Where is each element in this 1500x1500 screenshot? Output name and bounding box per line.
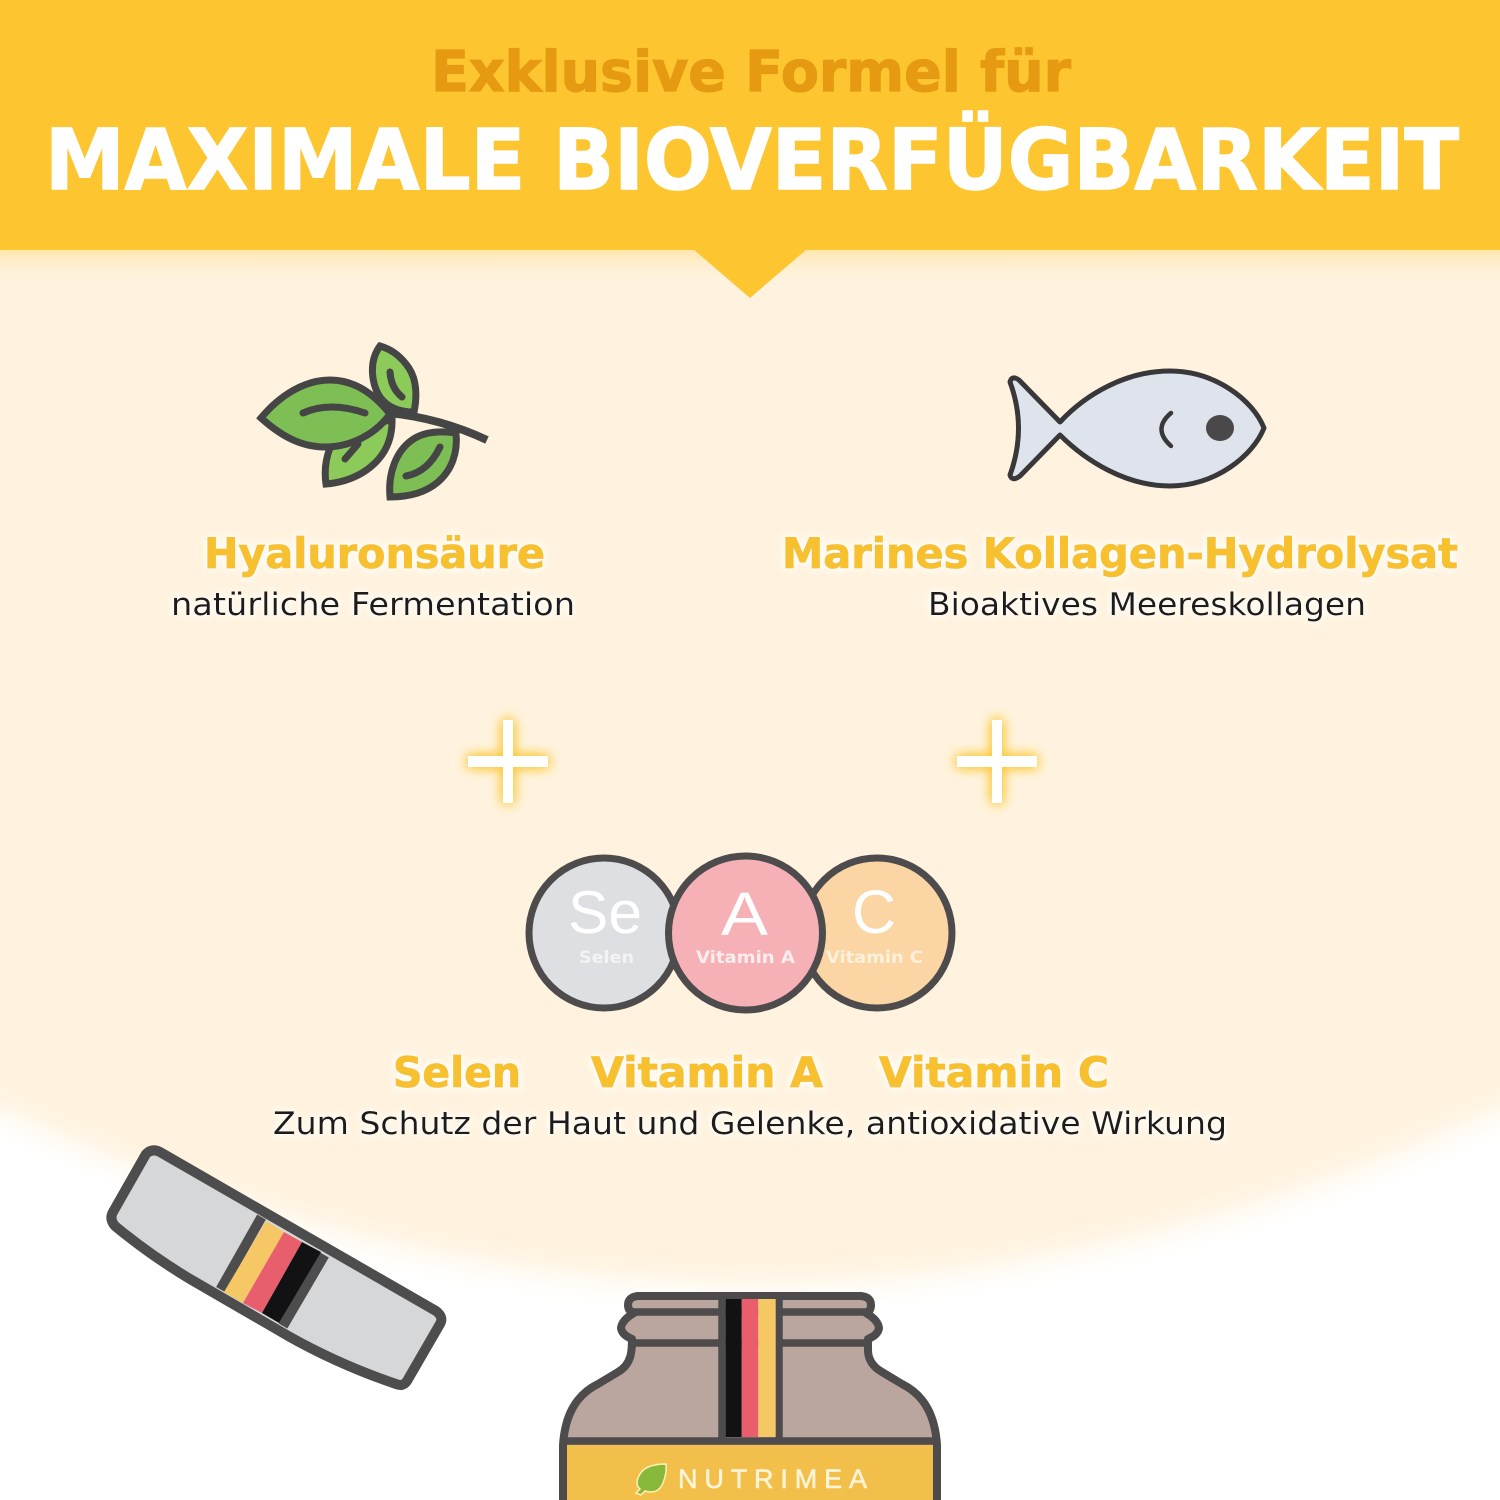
heading: Exklusive Formel für: Exklusive Formel für (431, 40, 1071, 105)
circle: vitamin C (802, 858, 952, 1008)
circle: vitamin A: A (721, 880, 768, 948)
circle: vitamin A (668, 856, 822, 1010)
background: cream panel with curved lower edge (0, 240, 1500, 1285)
circle: selen: Selen (579, 948, 634, 968)
bottle cap (111, 1150, 441, 1385)
icon: logo leaf (636, 1464, 666, 1495)
bottle label (567, 1445, 933, 1500)
circle: vitamin C: C (852, 878, 896, 946)
icon: plus right (957, 720, 1037, 803)
vitamin names and description: Vitamin C (879, 1048, 1109, 1097)
vitamin names and description (273, 1048, 1227, 1142)
icon: green leaves (261, 346, 487, 497)
header banner (0, 0, 1500, 298)
ingredient text: Hyaluronsäure: natürliche Fermentation (171, 587, 575, 623)
icon: fish (1010, 371, 1264, 486)
icon: plus left (468, 720, 548, 803)
vitamin names and description: Selen (393, 1048, 521, 1097)
header pointer (693, 249, 807, 298)
ingredient text: Hyaluronsäure: Hyaluronsäure (204, 529, 545, 578)
ingredient text: Marines Kollagen-Hydrolysat: Marines Kollagen-Hydrolysat (782, 529, 1458, 578)
ingredient text: Marines Kollagen-Hydrolysat: Bioaktives Meereskollagen (928, 587, 1366, 623)
brand name: NUTRIMEA (678, 1464, 867, 1494)
vitamin names and description: Vitamin A (591, 1048, 823, 1097)
ingredient text: Marines Kollagen-Hydrolysat (782, 529, 1458, 623)
circle: selen (529, 858, 679, 1008)
heading: Maximale Bioverfügbarkeit: MAXIMALE BIOVERFÜGBARKEIT (45, 111, 1459, 209)
header shadow (0, 250, 1500, 286)
vitamin circles (529, 856, 952, 1010)
circle: vitamin C: Vitamin C (826, 948, 923, 968)
circle: vitamin A: Vitamin A (696, 948, 796, 968)
circle: selen: Se (568, 879, 642, 946)
vitamin names and description: Zum Schutz der Haut und Gelenke, antioxidative Wirkung (273, 1106, 1227, 1142)
ingredient text: Hyaluronsäure (171, 529, 575, 623)
bottle (563, 1296, 937, 1500)
